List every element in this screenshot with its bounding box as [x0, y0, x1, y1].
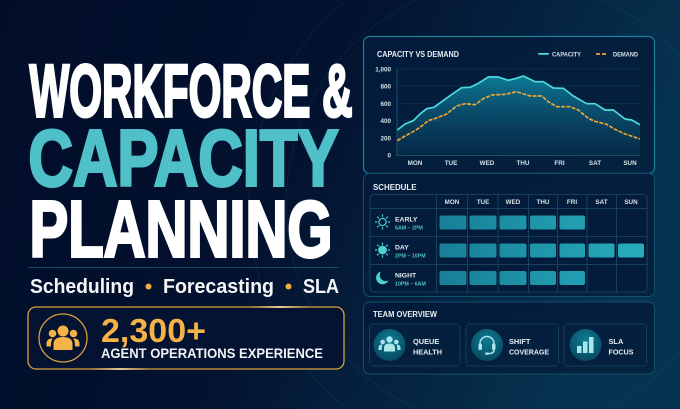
subtitle: scheduling, forecasting, SLA: Scheduling — [30, 275, 134, 298]
label: day shift: DAY — [395, 244, 409, 252]
icon: day sun — [375, 242, 390, 258]
subtitle: scheduling, forecasting, SLA — [28, 267, 339, 298]
line chart: MON — [408, 160, 423, 167]
line chart — [375, 66, 640, 167]
label: early shift: EARLY — [395, 216, 418, 224]
subtitle: scheduling, forecasting, SLA: Forecasting — [163, 275, 274, 298]
label: early shift: 6AM – 2PM — [395, 226, 424, 232]
panel: capacity vs demand: CAPACITY VS DEMAND — [377, 49, 459, 59]
title — [28, 50, 352, 274]
card: queue health: QUEUE — [413, 337, 439, 346]
subtitle: scheduling, forecasting, SLA: SLA — [303, 275, 339, 298]
line chart: SAT — [589, 160, 601, 167]
line chart: 200 — [380, 136, 391, 142]
callout: agent operations experience: AGENT OPERATIONS EXPERIENCE — [101, 345, 323, 361]
line chart: 1,000 — [375, 66, 391, 74]
schedule grid: THU — [537, 199, 550, 206]
title: CAPACITY — [28, 114, 338, 202]
schedule grid: FRI — [567, 199, 577, 206]
icon: agent group — [39, 314, 87, 362]
schedule grid: SAT — [595, 199, 608, 206]
callout: agent operations experience — [28, 306, 344, 370]
schedule grid — [370, 194, 647, 292]
legend: DEMAND — [613, 52, 638, 58]
line chart: FRI — [554, 160, 565, 167]
label: day shift: 2PM – 10PM — [395, 254, 426, 260]
card: shift coverage — [466, 324, 558, 366]
card: queue health — [370, 324, 460, 366]
panel: team overview: TEAM OVERVIEW — [373, 310, 438, 319]
label: night shift: NIGHT — [395, 272, 417, 280]
line chart: 400 — [380, 118, 391, 125]
schedule grid: MON — [445, 199, 460, 206]
schedule grid: TUE — [477, 199, 489, 206]
line chart: SUN — [623, 160, 637, 167]
card: queue health: HEALTH — [413, 348, 442, 356]
card: shift coverage: COVERAGE — [509, 348, 549, 356]
callout: agent operations experience: 2,300+ — [101, 312, 206, 349]
icon: early sun — [375, 214, 390, 230]
legend — [538, 52, 638, 58]
schedule grid: SUN — [624, 199, 638, 206]
card: shift coverage: SHIFT — [509, 337, 531, 346]
line chart: 600 — [380, 101, 391, 108]
label: night shift: 10PM – 6AM — [395, 282, 426, 288]
title: WORKFORCE & — [30, 50, 352, 132]
legend: CAPACITY — [552, 52, 582, 58]
label: early shift — [395, 216, 424, 232]
line chart: 0 — [387, 152, 391, 160]
title: PLANNING — [30, 184, 332, 274]
line chart: 800 — [380, 84, 391, 90]
line chart: WED — [480, 160, 495, 167]
line chart: THU — [517, 160, 530, 167]
label: night shift — [395, 272, 426, 288]
line chart: TUE — [445, 160, 457, 167]
panel: schedule: SCHEDULE — [373, 183, 417, 192]
card: SLA focus — [564, 324, 646, 366]
shift bars — [440, 216, 644, 285]
label: day shift — [395, 244, 426, 260]
panel: schedule — [364, 174, 654, 296]
card: SLA focus: SLA — [608, 337, 624, 346]
panel: capacity vs demand — [364, 36, 654, 174]
panel: team overview — [364, 302, 654, 374]
icon: moon — [376, 272, 388, 284]
card: SLA focus: FOCUS — [608, 348, 634, 356]
schedule grid: WED — [506, 199, 521, 206]
